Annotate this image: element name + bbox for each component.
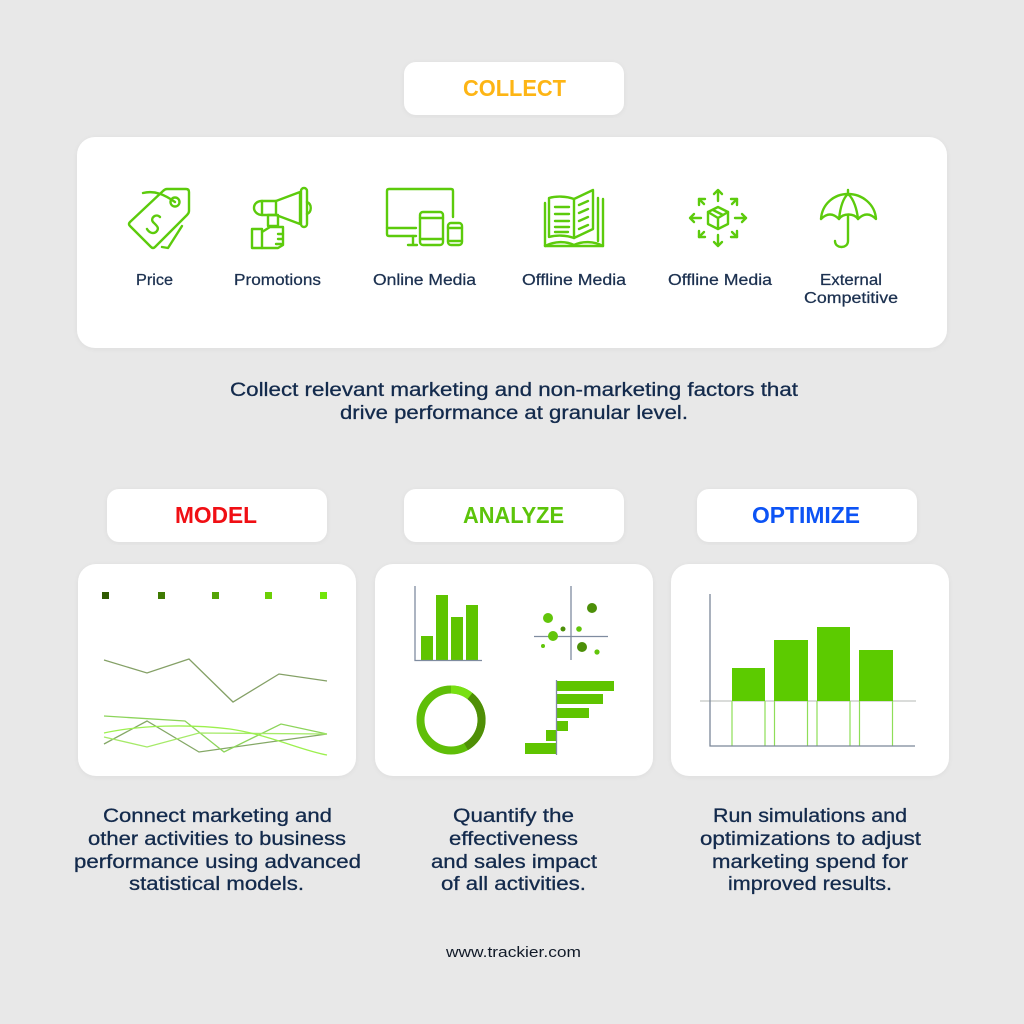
text: analyze description: effectiveness xyxy=(449,828,578,850)
icon: box with arrows xyxy=(690,190,746,246)
text: optimize description: marketing spend for xyxy=(712,851,909,873)
panel: collect factors xyxy=(77,137,947,348)
text: model description: Connect marketing and xyxy=(103,805,332,827)
text: analyze description: of all activities. xyxy=(441,873,586,895)
text: optimize description: Run simulations and xyxy=(713,805,907,827)
legend squares xyxy=(102,592,327,599)
label: Offline Media (book): Offline Media xyxy=(522,272,626,289)
heading: MODEL xyxy=(107,489,327,542)
heading: ANALYZE xyxy=(404,489,624,542)
chart: bar with baseline xyxy=(700,594,916,746)
text: model description: statistical models. xyxy=(129,873,304,895)
chart: diverging bars xyxy=(525,680,614,755)
panel: model chart xyxy=(78,564,356,776)
text: model description xyxy=(74,805,361,895)
panel: optimize chart xyxy=(671,564,949,776)
heading: ANALYZE: ANALYZE xyxy=(463,502,564,528)
icon: umbrella xyxy=(821,190,876,247)
text: optimize description xyxy=(700,805,922,895)
label: External Competitive: External xyxy=(820,272,882,289)
text: optimize description: optimizations to adjust xyxy=(700,828,922,850)
label: External Competitive xyxy=(804,272,898,307)
text: analyze description: and sales impact xyxy=(431,851,598,873)
heading: COLLECT: COLLECT xyxy=(463,75,566,101)
text: model description: other activities to business xyxy=(88,828,346,850)
label: Promotions: Promotions xyxy=(234,272,321,289)
chart: bars xyxy=(415,586,482,660)
text: collect description: Collect relevant marketing and non-marketing factors that xyxy=(230,379,799,401)
heading: OPTIMIZE xyxy=(697,489,917,542)
label: Price: Price xyxy=(136,272,173,289)
text: optimize description: improved results. xyxy=(728,873,892,895)
footer: website: www.trackier.com xyxy=(445,944,581,961)
icon: price tag xyxy=(129,189,189,248)
icon: megaphone xyxy=(252,188,311,248)
label: Online Media: Online Media xyxy=(373,272,476,289)
text: analyze description xyxy=(431,805,598,895)
line chart xyxy=(104,659,327,755)
text: collect description: drive performance at granular level. xyxy=(340,402,688,424)
icon: devices xyxy=(387,189,462,245)
panel: analyze charts xyxy=(375,564,653,776)
text: analyze description: Quantify the xyxy=(453,805,574,827)
chart: scatter xyxy=(534,586,608,660)
heading: MODEL: MODEL xyxy=(175,502,257,528)
label: Offline Media (box): Offline Media xyxy=(668,272,772,289)
chart: donut xyxy=(420,689,482,750)
icon: open book xyxy=(545,190,603,246)
label: External Competitive: Competitive xyxy=(804,290,898,307)
heading: COLLECT xyxy=(404,62,624,115)
heading: OPTIMIZE: OPTIMIZE xyxy=(752,502,860,528)
text: model description: performance using advanced xyxy=(74,851,361,873)
text: collect description xyxy=(230,379,799,424)
